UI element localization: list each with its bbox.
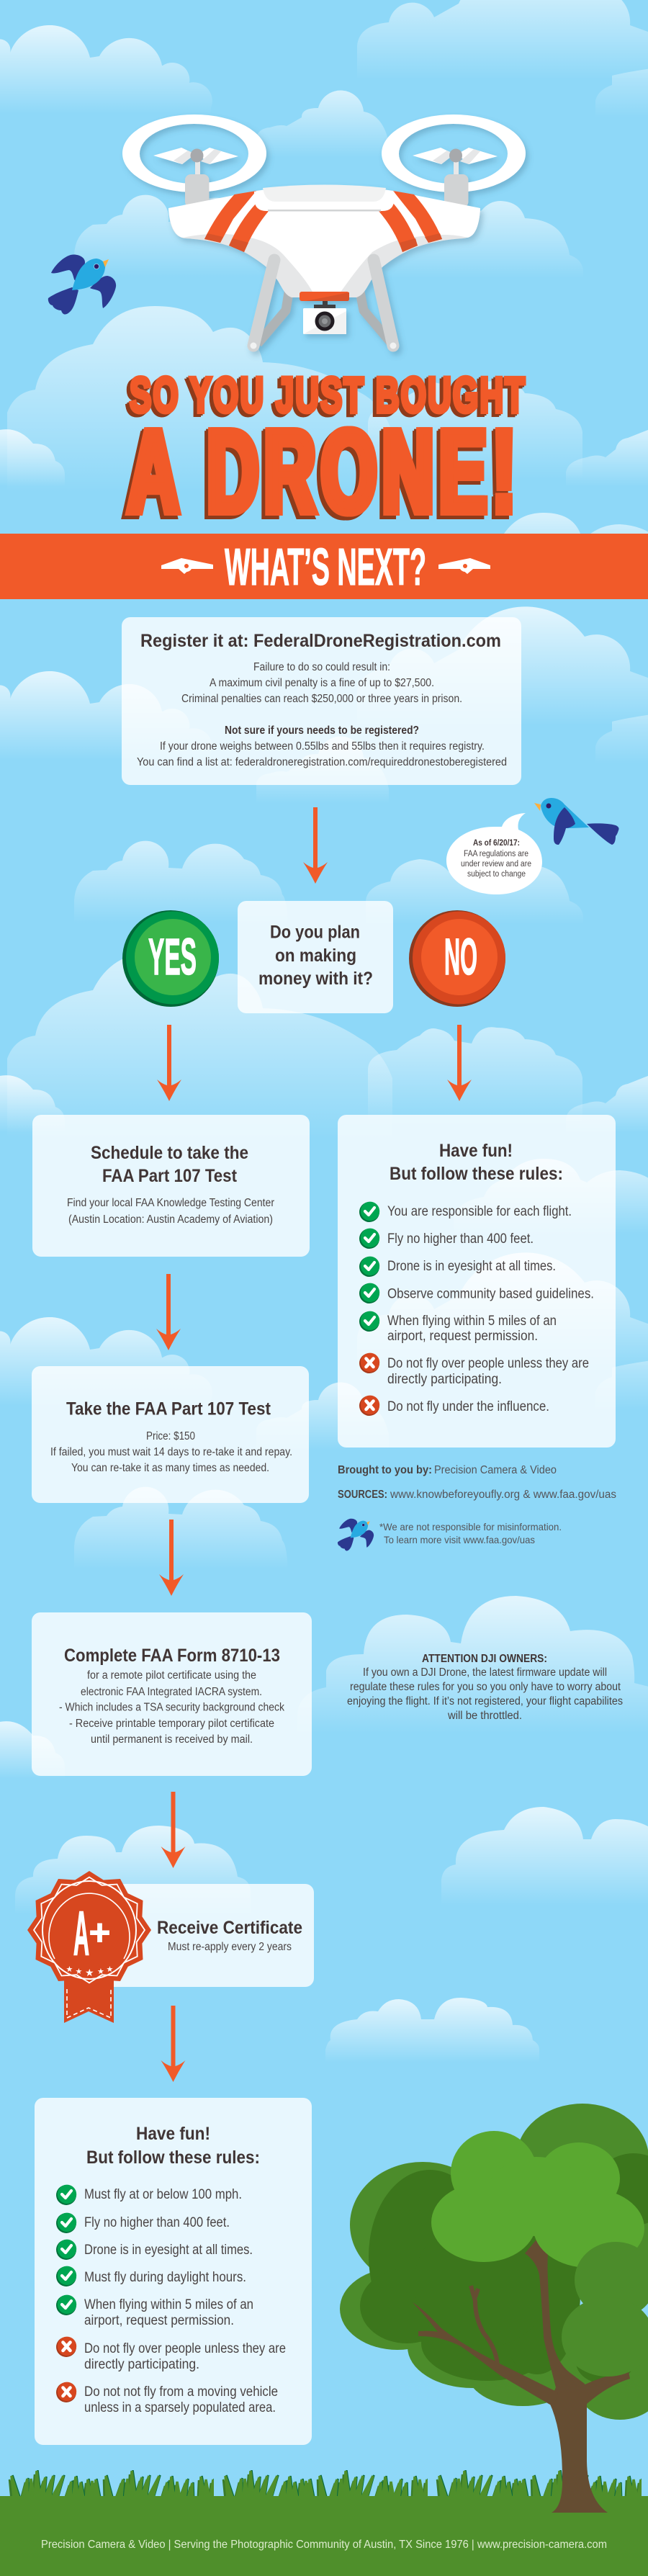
- A+ grade: A: [73, 1899, 89, 1968]
- callout text: As of 6/20/17:: [473, 839, 520, 848]
- motors and hubs: [185, 148, 468, 207]
- icon: propeller right: [438, 558, 490, 574]
- propeller blades: left: [153, 148, 238, 164]
- form text: until permanent is received by mail.: [91, 1733, 253, 1746]
- panel: complete form: [32, 1612, 312, 1776]
- stars: [66, 1965, 114, 1978]
- disclaimer: To learn more visit www.faa.gov/uas: [384, 1534, 535, 1545]
- illustration: drone: [122, 115, 526, 349]
- certificate text: Must re-apply every 2 years: [168, 1941, 292, 1953]
- right branch: [583, 2371, 630, 2404]
- question text: money with it?: [258, 969, 373, 989]
- take test heading: Take the FAA Part 107 Test: [66, 1399, 271, 1419]
- commercial rule list: Drone is in eyesight at all times.: [84, 2243, 253, 2258]
- commercial rule list: directly participating.: [84, 2357, 199, 2372]
- stars: ★: [85, 1967, 94, 1978]
- stars: ★: [66, 1965, 73, 1974]
- hobbyist rule list: Observe community based guidelines.: [387, 1286, 594, 1302]
- schedule text: [67, 1197, 274, 1226]
- drone body top: [168, 186, 480, 293]
- banner heading: WHAT’S NEXT?: [225, 539, 426, 596]
- attention DJI owners note: [347, 1653, 623, 1722]
- panel: receive certificate: [79, 1884, 314, 1987]
- commercial rule list: Must fly at or below 100 mph.: [84, 2187, 242, 2202]
- commercial rule list: Fly no higher than 400 feet.: [84, 2215, 230, 2230]
- cloud layer: first repeat: [0, 0, 648, 601]
- callout text: under review and are: [461, 860, 531, 869]
- propeller blades: right: [413, 148, 498, 164]
- icon: A+ rosette badge: [27, 1871, 151, 2023]
- schedule heading: FAA Part 107 Test: [102, 1166, 238, 1186]
- arrow: schedule to test: [156, 1274, 181, 1350]
- form text: - Receive printable temporary pilot certificate: [69, 1718, 274, 1730]
- take test text: Price: $150: [146, 1430, 195, 1442]
- commercial rule list: Do not not fly from a moving vehicle: [84, 2384, 278, 2400]
- register penalties text: If your drone weighs between 0.55lbs and 55lbs then it requires registry.: [160, 740, 485, 753]
- attention DJI owners note: ATTENTION DJI OWNERS:: [422, 1653, 547, 1665]
- credits and sources: Brought to you by:: [338, 1464, 432, 1476]
- panel: hobbyist rules: [338, 1115, 616, 1448]
- hobbyist rule list: Fly no higher than 400 feet.: [387, 1231, 534, 1247]
- arrow: no: [447, 1025, 472, 1101]
- hobbyist rule list: Do not fly over people unless they are: [387, 1356, 589, 1371]
- mid foliage front: [562, 2242, 648, 2377]
- button: no: [409, 910, 505, 1007]
- question text: Do you plan: [270, 922, 360, 942]
- stars: ★: [107, 1965, 114, 1974]
- form text: - Which includes a TSA security background check: [59, 1701, 284, 1714]
- arrow: form to certificate: [161, 1792, 186, 1868]
- commercial rules heading: Have fun!: [136, 2124, 210, 2144]
- hobbyist rule list: [387, 1204, 594, 1414]
- clouds: lower sky: [15, 1596, 648, 2074]
- dark foliage: [360, 2153, 648, 2384]
- commercial rule list: airport, request permission.: [84, 2313, 234, 2328]
- register penalties text: Not sure if yours needs to be registered?: [225, 724, 419, 737]
- attention DJI owners note: regulate these rules for you so you only have to worry about: [350, 1681, 621, 1693]
- attention DJI owners note: enjoying the flight. If it’s not registered, your flight capabilites: [347, 1695, 623, 1707]
- commercial rule list: When flying within 5 miles of an: [84, 2297, 253, 2312]
- disclaimer: [379, 1521, 562, 1545]
- footer text: Precision Camera & Video | Serving the Photographic Community of Austin, TX Since 1976 | www.precision-camera.com: [41, 2539, 607, 2551]
- hobbyist rule list: When flying within 5 miles of an: [387, 1314, 557, 1329]
- rear landing struts: [258, 288, 392, 344]
- question text: on making: [275, 946, 356, 966]
- commercial rule list: [84, 2187, 286, 2415]
- illustration: tree: [340, 2104, 648, 2513]
- take test text: [50, 1430, 292, 1474]
- commercial rule list: Do not fly over people unless they are: [84, 2341, 286, 2356]
- drone underside: [168, 208, 480, 297]
- hobbyist rules heading: [390, 1141, 563, 1184]
- arrow: yes: [157, 1025, 181, 1101]
- arrow: test to form: [159, 1520, 184, 1596]
- stars: ★: [97, 1967, 104, 1976]
- illustration: grass: [0, 2470, 648, 2576]
- register penalties text: Failure to do so could result in:: [253, 661, 390, 673]
- panel: schedule test: [32, 1115, 310, 1257]
- schedule heading: [91, 1143, 248, 1186]
- cloud layer: second repeat: [0, 606, 648, 1247]
- hobbyist rule list: directly participating.: [387, 1372, 502, 1387]
- credits and sources: www.knowbeforeyoufly.org & www.faa.gov/uas: [390, 1489, 616, 1501]
- commercial rule list: Must fly during daylight hours.: [84, 2270, 246, 2285]
- button: yes: [122, 910, 219, 1007]
- panel: question: [238, 901, 393, 1013]
- rosette: [27, 1871, 151, 1989]
- arrow: register to question: [303, 807, 328, 884]
- commercial rule list: unless in a sparsely populated area.: [84, 2400, 276, 2415]
- hobbyist rule list: Do not fly under the influence.: [387, 1399, 549, 1414]
- hobbyist rule icons: [359, 1202, 379, 1416]
- outer foliage: [340, 2104, 648, 2420]
- form text: [59, 1669, 284, 1746]
- cloud layer: third repeat: [0, 1252, 648, 1789]
- icon: propeller left: [161, 558, 213, 574]
- trunk: [525, 2240, 608, 2513]
- battery cover: [254, 184, 395, 212]
- hobbyist rules heading: Have fun!: [439, 1141, 513, 1161]
- register penalties text: You can find a list at: federaldroneregistration.com/requireddronestoberegistered: [137, 756, 507, 768]
- button: yes: YES: [148, 929, 197, 986]
- propeller guard ring: left: [122, 115, 266, 192]
- schedule heading: Schedule to take the: [91, 1143, 248, 1163]
- schedule text: (Austin Location: Austin Academy of Aviation): [68, 1213, 273, 1226]
- callout text: subject to change: [467, 870, 526, 879]
- credits and sources: [338, 1464, 616, 1501]
- hobbyist rule list: airport, request permission.: [387, 1329, 538, 1344]
- button: no: NO: [444, 929, 477, 986]
- disclaimer: *We are not responsible for misinformation.: [379, 1521, 562, 1532]
- camera gimbal: [300, 292, 349, 334]
- left branch: [413, 2302, 558, 2407]
- arrow: certificate to rules: [161, 2006, 186, 2082]
- take test text: If failed, you must wait 14 days to re-take it and repay.: [50, 1446, 292, 1458]
- form text: electronic FAA Integrated IACRA system.: [81, 1686, 262, 1698]
- attention DJI owners note: will be throttled.: [447, 1710, 522, 1722]
- form heading: Complete FAA Form 8710-13: [64, 1646, 280, 1666]
- front landing struts: [253, 260, 393, 346]
- register penalties text: A maximum civil penalty is a fine of up to $27,500.: [210, 677, 434, 689]
- commercial rules heading: But follow these rules:: [86, 2148, 260, 2168]
- side branch: [471, 2286, 498, 2369]
- panel: register: [122, 617, 521, 785]
- hobbyist rule list: You are responsible for each flight.: [387, 1204, 572, 1219]
- panel: take test: [32, 1366, 309, 1503]
- ribbon: [64, 1979, 114, 2023]
- callout text: FAA regulations are: [464, 850, 528, 858]
- register heading: Register it at: FederalDroneRegistration.com: [140, 631, 501, 651]
- credits and sources: Precision Camera & Video: [434, 1464, 557, 1476]
- credits and sources: SOURCES:: [338, 1489, 387, 1501]
- certificate heading: Receive Certificate: [157, 1918, 302, 1938]
- orange stripes: right: [378, 191, 442, 252]
- icon: small bird: [338, 1519, 374, 1551]
- light foliage: [431, 2131, 644, 2268]
- stars: ★: [75, 1967, 82, 1976]
- register penalties text: Criminal penalties can reach $250,000 or three years in prison.: [181, 693, 462, 705]
- orange stripes: left: [204, 191, 269, 252]
- icon: perched bird: [534, 798, 619, 845]
- callout text: [461, 839, 531, 879]
- commercial rule icons: [56, 2185, 76, 2402]
- callout: FAA regulations note: [446, 813, 542, 894]
- take test text: You can re-take it as many times as needed.: [71, 1462, 269, 1474]
- schedule text: Find your local FAA Knowledge Testing Center: [67, 1197, 274, 1209]
- A+ grade: +: [89, 1913, 111, 1953]
- icon: flying bird: [48, 255, 116, 315]
- strut feet: [251, 343, 396, 349]
- propeller guard ring: right: [382, 115, 526, 192]
- attention DJI owners note: If you own a DJI Drone, the latest firmware update will: [363, 1666, 607, 1679]
- panel: commercial rules: [35, 2098, 312, 2445]
- register penalties text: [137, 661, 507, 768]
- form text: for a remote pilot certificate using the: [87, 1669, 256, 1682]
- hobbyist rules heading: But follow these rules:: [390, 1164, 563, 1184]
- question text: [258, 922, 373, 989]
- banner: What's next: [0, 534, 648, 599]
- commercial rules heading: [86, 2124, 260, 2168]
- hobbyist rule list: Drone is in eyesight at all times.: [387, 1259, 556, 1274]
